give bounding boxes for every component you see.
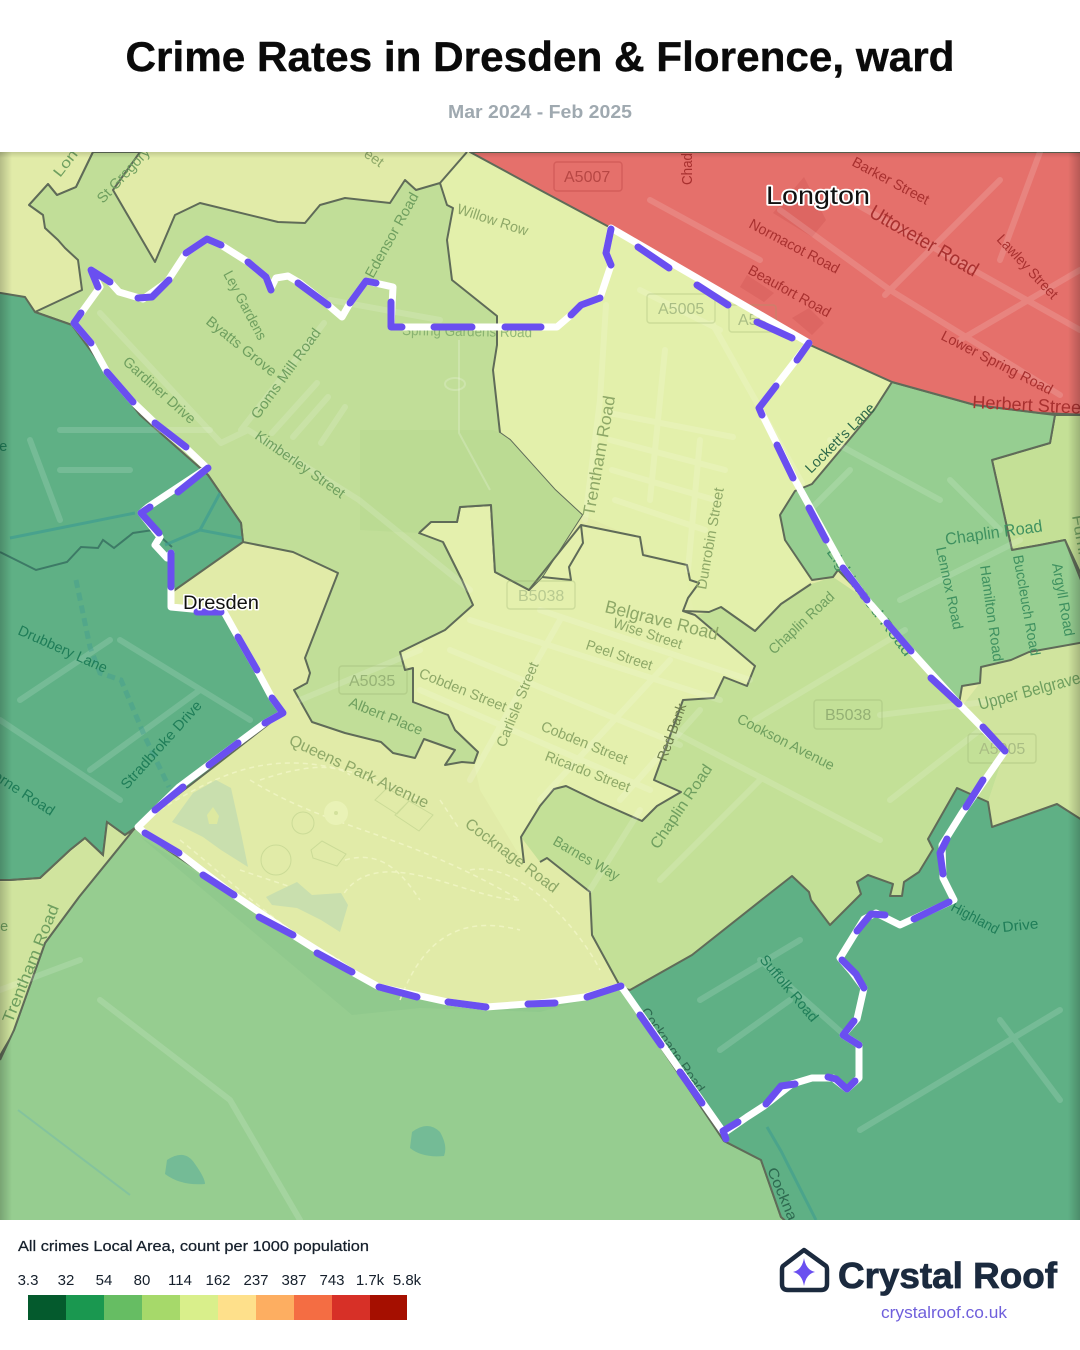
road labels: south-east and east: Hamilton Road (976, 564, 1005, 663)
road labels: centre: Dunrobin Street (694, 486, 728, 591)
road labels: north-west: Goms Mill Road (248, 326, 325, 422)
road labels: north-west: Edensor Road (363, 190, 423, 281)
lake islet (207, 807, 219, 824)
road labels: red ward: Uttoxeter Road (866, 201, 982, 281)
road labels: dark green areas: Stradbroke Drive (118, 698, 206, 793)
area: west dark green ward (0, 292, 283, 880)
road badges: B5038 (825, 707, 871, 724)
ward boundary: purple dashes (74, 229, 1005, 1139)
road labels: centre: Queens Park Avenue (286, 732, 431, 812)
road labels: south-east and east: Lennox Road (932, 546, 965, 631)
road badges: A50 (738, 312, 767, 329)
road labels: dark green areas: Drive (1002, 916, 1039, 936)
area: east green ward (780, 382, 1080, 704)
road badges: A5007 (564, 169, 610, 186)
road labels: centre: Cobden Street (417, 666, 509, 716)
stream (10, 493, 242, 545)
title: Crime Rates in Dresden & Florence, ward (126, 33, 954, 80)
road labels: south-east and east: Buccleuch Road (1009, 554, 1043, 657)
road badges: A5035 (349, 673, 395, 690)
road labels: red ward: Lower Spring Road (938, 328, 1055, 398)
road labels: centre (286, 394, 728, 897)
legend values: 387 (281, 1272, 307, 1289)
road labels: centre: Wise Street (611, 616, 684, 653)
road labels: red ward: Beaufort Road (745, 263, 833, 321)
park lake 1 (172, 780, 248, 867)
legend values (18, 1272, 422, 1289)
place label: Dresden: Dresden (183, 593, 259, 614)
road labels: centre: Trentham Road (579, 394, 619, 518)
road labels: south-east and east: Lockett's Lane (803, 400, 879, 477)
area: darker red buildings (740, 177, 826, 335)
road labels: centre: Cobden Street (539, 719, 630, 768)
area: north-west medium green ward (29, 152, 582, 765)
place label: Longton: Longton (766, 182, 870, 210)
road labels: red ward (680, 153, 1080, 418)
road labels: north-west (51, 144, 532, 502)
legend values: 32 (58, 1272, 74, 1289)
legend values: 237 (243, 1272, 269, 1289)
road labels: red ward: Normacot Road (746, 216, 842, 277)
road labels: north-west: Lon (51, 147, 82, 180)
legend values: 3.3 (18, 1272, 38, 1289)
logo: Crystal Roof (782, 1250, 1058, 1322)
road labels: centre: Red Bank (655, 701, 691, 763)
road labels: centre: Ricardo Street (543, 749, 632, 796)
map edge shading (0, 152, 1080, 1220)
road labels: centre: Cocknage Road (462, 816, 561, 897)
area: north-east central light ward (440, 152, 892, 631)
road labels: dark green areas: Cocknage Road (637, 1005, 707, 1096)
road labels: north-west: Ley Gardens (219, 268, 269, 343)
legend title: All crimes Local Area, count per 1000 population (18, 1238, 369, 1255)
park footpath and pond in north ward (445, 340, 490, 490)
road labels: south-east and east (347, 400, 1080, 885)
road labels: dark green areas: eet (361, 146, 386, 171)
area: bottom-left green strip (0, 824, 135, 1062)
road labels: south-east and east: Barnes Way (550, 834, 623, 885)
road badges: B5038 (518, 588, 564, 605)
legend values: 162 (205, 1272, 231, 1289)
legend values: 1.7k (356, 1272, 385, 1289)
park paths (160, 763, 600, 1000)
area: south-east dark green ward (621, 788, 1080, 1225)
road labels: north-west: Gardiner Drive (119, 354, 198, 428)
road badges: A5005 (658, 301, 704, 318)
bottom-left ward line (0, 822, 135, 1060)
legend values: 54 (96, 1272, 112, 1289)
road labels: dark green areas: Highland (948, 899, 1002, 938)
area: central light ward (400, 505, 755, 863)
road labels: north-west: Spring Gardens Road (402, 323, 532, 341)
road labels: south-east and east: Chaplin Road (944, 517, 1044, 549)
road labels: dark green areas: Suffolk Road (756, 952, 821, 1025)
area: south green ward (0, 828, 790, 1225)
road labels: centre: Belgrave Road (603, 596, 720, 644)
road labels: centre: Peel Street (584, 638, 654, 674)
logo wordmark: Crystal Roof (838, 1255, 1058, 1296)
road labels: south-east and east: Chaplin Road (647, 761, 716, 852)
area: far east ward (962, 642, 1080, 827)
road badges (339, 162, 1036, 763)
legend values: 743 (319, 1272, 345, 1289)
railway dashed line (76, 580, 169, 787)
road labels: south-east and east: Lightwood Road (823, 545, 915, 660)
website url: crystalroof.co.uk (881, 1304, 1008, 1322)
road network (0, 152, 1080, 1220)
internal ward boundary (0, 530, 172, 570)
road labels: red ward: Chad (680, 153, 696, 185)
road labels: north-west: Willow Row (455, 202, 531, 240)
road labels: south-east and east: Cookson Avenue (734, 711, 837, 774)
south ponds (165, 1126, 445, 1184)
road labels: north-west: St Gregory (94, 144, 154, 207)
legend colour scale (28, 1295, 407, 1320)
legend values: 80 (134, 1272, 150, 1289)
road labels: north-west: Kimberley Street (252, 428, 348, 502)
legend (18, 1238, 422, 1320)
road labels: dark green areas: Trentham Road (0, 902, 63, 1025)
road labels: dark green areas: Drubbery Lane (15, 623, 110, 677)
icon: house with sparkle (782, 1250, 827, 1290)
area: darker park patch (418, 432, 582, 589)
park lake 2 (266, 882, 348, 932)
park bandstand (324, 801, 348, 825)
legend values: 5.8k (393, 1272, 422, 1289)
road labels: red ward: Barker Street (849, 154, 932, 208)
road labels: south-east and east: Albert Place (347, 695, 425, 739)
road labels: red ward: Lawley Street (993, 232, 1061, 303)
road labels: centre: Carlisle Street (494, 660, 542, 749)
area: north-east small yellow ward (992, 415, 1080, 583)
legend values: 114 (168, 1272, 192, 1289)
road labels: north-west: Byatts Grove (202, 314, 279, 380)
park outlines (261, 788, 433, 875)
road badges: A5005 (979, 741, 1025, 758)
road labels: dark green areas (0, 146, 1039, 1224)
subtitle: date range: Mar 2024 - Feb 2025 (448, 102, 632, 122)
area: south-east medium green ward (521, 577, 1005, 990)
ward boundary: white line (74, 228, 1005, 1133)
road labels: dark green areas: Cockna (763, 1165, 800, 1224)
area: red Longton ward (470, 152, 1080, 415)
road labels: south-east and east: Argyll Road (1048, 562, 1077, 638)
area: darker band along boundary (379, 990, 540, 1000)
area: yellow ward outlines (29, 152, 811, 988)
road labels: south-east and east: Chaplin Road (766, 589, 838, 658)
